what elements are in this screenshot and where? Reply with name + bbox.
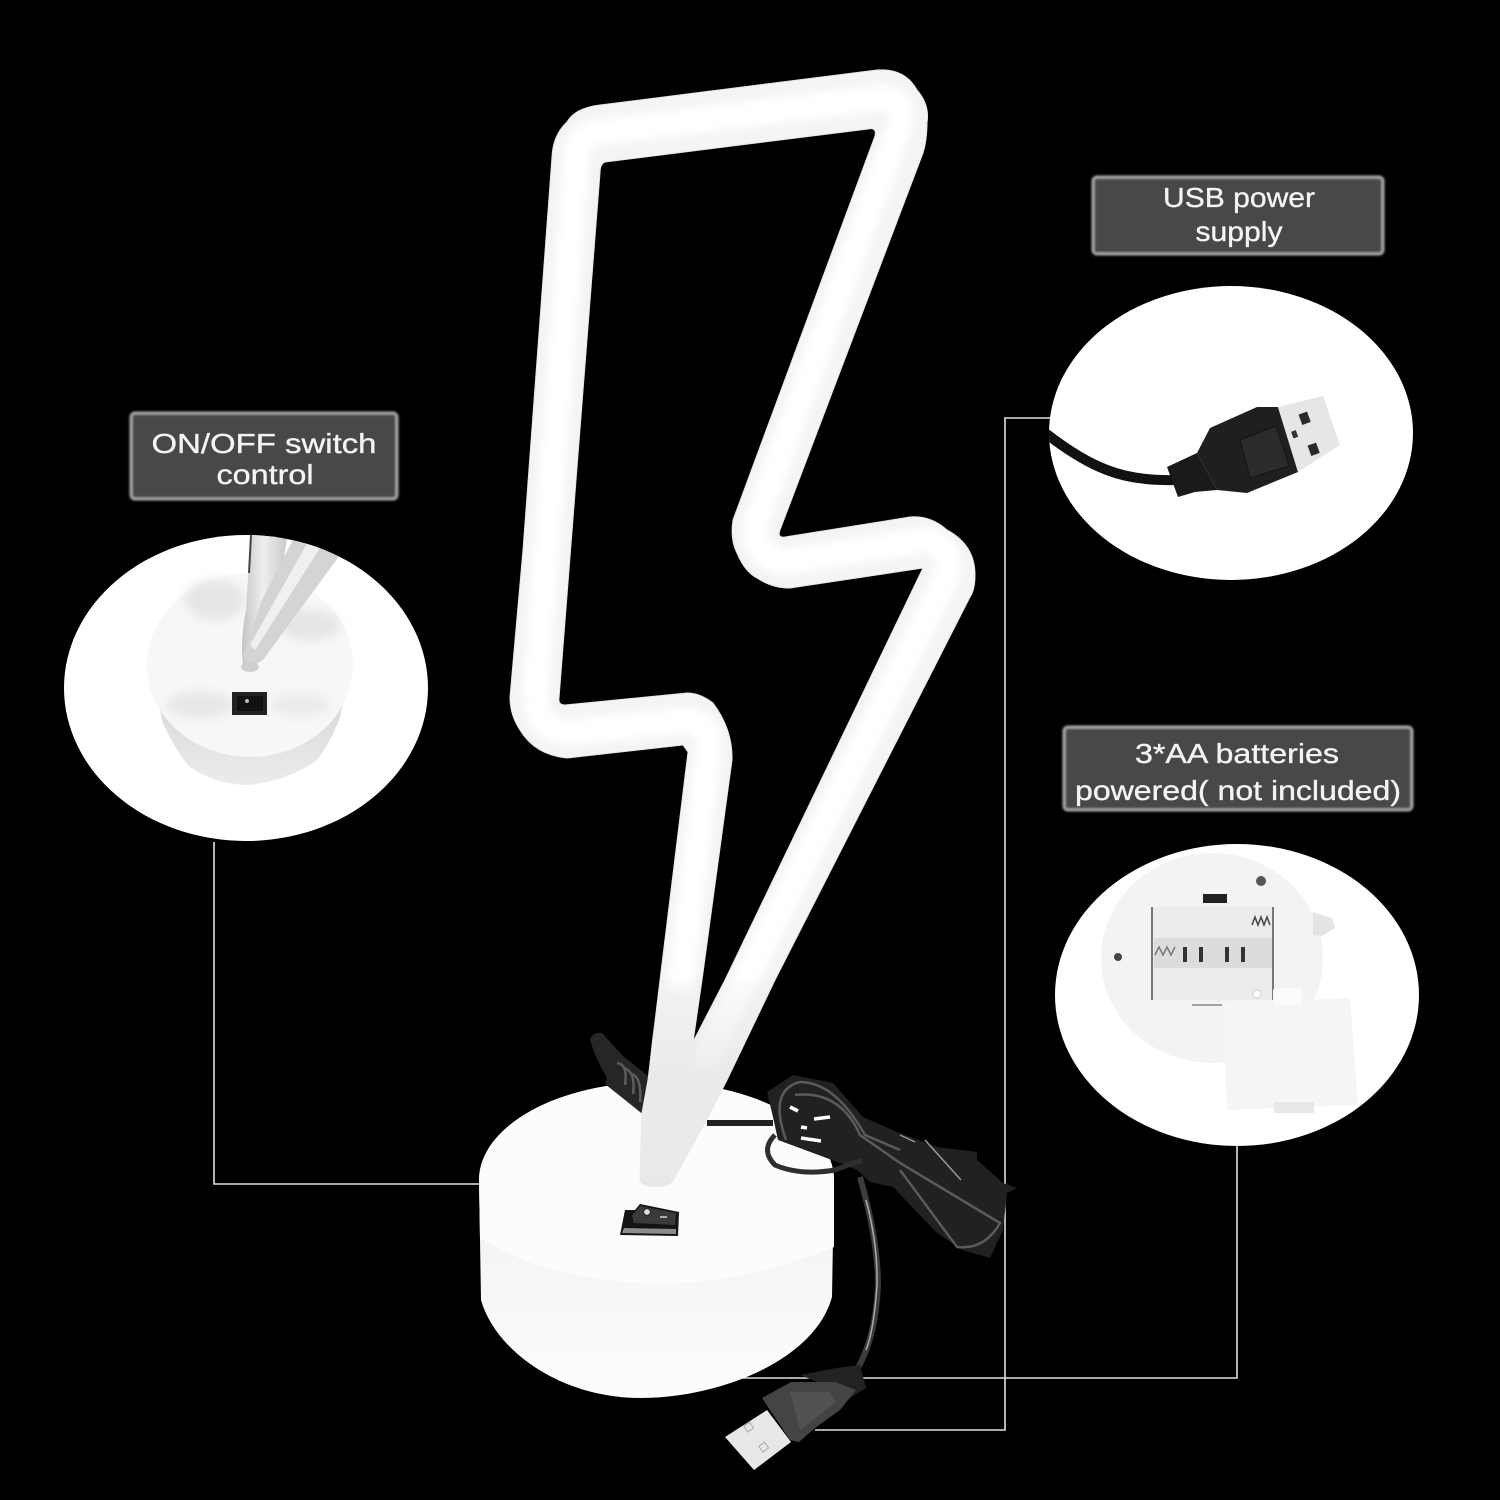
bolt socket — [640, 1175, 672, 1187]
side knob — [1313, 912, 1335, 936]
small slot — [1203, 894, 1227, 903]
label: ON/OFF switch control — [131, 413, 397, 499]
label: ON/OFF switch control: control — [216, 459, 314, 490]
neon lightning bolt — [510, 70, 975, 1187]
USB strain relief — [1167, 453, 1217, 497]
lamp base — [479, 1033, 834, 1398]
inset: USB connector close-up — [1044, 286, 1413, 580]
cable bundle — [767, 1075, 1017, 1368]
rear cable — [707, 1120, 773, 1126]
USB metal shell — [1278, 396, 1340, 472]
USB plug on cord — [725, 1365, 866, 1470]
inset: battery compartment close-up — [1055, 844, 1419, 1146]
USB cable — [1044, 432, 1175, 480]
connector lines — [214, 418, 1237, 1430]
label: USB power supply: supply — [1196, 216, 1282, 247]
power plug behind bolt — [590, 1033, 648, 1116]
screw and hole — [1256, 876, 1266, 886]
label: USB power supply: USB power — [1163, 182, 1315, 213]
label: 3*AA batteries powered — [1064, 727, 1412, 810]
bolt tube highlight — [535, 98, 948, 1070]
label: ON/OFF switch control: ON/OFF switch — [152, 428, 376, 459]
label: USB power supply — [1093, 177, 1383, 254]
label: 3*AA batteries powered: powered( not included) — [1075, 775, 1401, 806]
label: 3*AA batteries powered: 3*AA batteries — [1135, 738, 1339, 769]
rocker switch — [620, 1204, 679, 1236]
compartment — [1152, 907, 1273, 1005]
inset bolt tubes — [242, 530, 288, 668]
battery disc — [1101, 853, 1323, 1063]
USB moulded body — [1197, 407, 1298, 493]
cord to USB plug — [858, 1177, 878, 1368]
lower tube tint — [640, 980, 775, 1187]
base top surface — [479, 1082, 834, 1283]
inset rocker switch — [232, 692, 267, 715]
inset: switch close-up — [64, 530, 428, 841]
base cylinder — [479, 1082, 834, 1398]
inset base top — [150, 660, 352, 757]
battery cover — [1223, 988, 1358, 1113]
inset base side — [160, 706, 342, 785]
